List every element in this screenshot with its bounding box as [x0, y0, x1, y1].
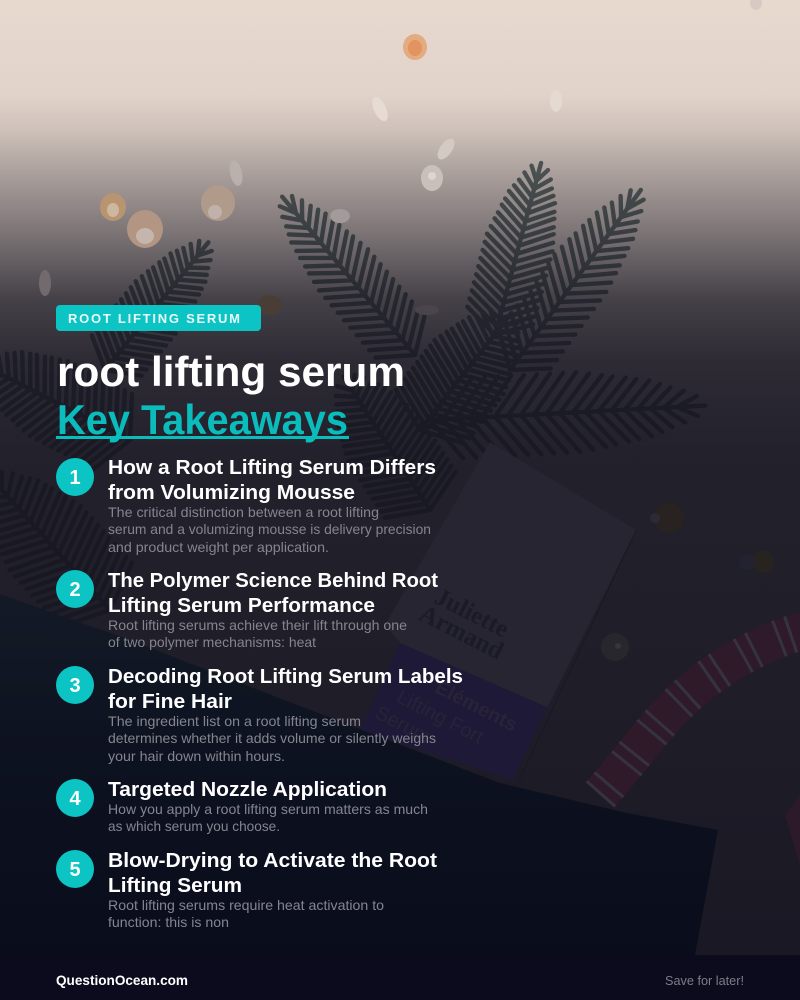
dim sequins on right [601, 503, 774, 661]
heading 4: Targeted Nozzle Application [108, 779, 387, 801]
description 2: of two polymer mechanisms: heat [108, 634, 316, 650]
paper edge [517, 530, 636, 785]
description 1: The critical distinction between a root lifting [108, 504, 379, 520]
product card [360, 442, 636, 781]
description 2: Root lifting serums achieve their lift through one [108, 617, 407, 633]
heading 2: Lifting Serum Performance [108, 595, 375, 617]
description 1 [108, 504, 431, 555]
description 4: as which serum you choose. [108, 818, 280, 834]
description 5: function: this is non [108, 914, 229, 930]
description 4: How you apply a root lifting serum matters as much [108, 801, 428, 817]
heading 3 [108, 666, 463, 713]
number badge 3 [56, 666, 94, 704]
takeaway 4 [56, 779, 428, 834]
heading 2 [108, 570, 438, 617]
description 3: determines whether it adds volume or silently weighs [108, 730, 436, 746]
heading 5 [108, 850, 437, 897]
footer bar [0, 955, 800, 1000]
heading 5: Blow-Drying to Activate the Root [108, 850, 437, 872]
product label text: Lifting Fort [393, 686, 487, 749]
heading 5: Lifting Serum [108, 875, 242, 897]
description 5 [108, 897, 384, 930]
heading 1 [108, 457, 436, 504]
number badge 1: 1 [69, 467, 81, 489]
number badge 5 [56, 850, 94, 888]
category tag [56, 305, 261, 331]
number badge 2 [56, 570, 94, 608]
product label text [371, 657, 521, 781]
title: root lifting serum [57, 348, 405, 395]
product label text: Serum [371, 702, 434, 748]
fir branches [0, 154, 707, 642]
takeaway 2 [56, 570, 438, 650]
number badge 5: 5 [69, 859, 81, 881]
footer save note: Save for later! [665, 973, 744, 988]
description 1: serum and a volumizing mousse is delivery precision [108, 521, 431, 537]
product label text: Éléments [431, 676, 521, 736]
product brand name [415, 581, 518, 665]
description 4 [108, 801, 428, 834]
number badge 4: 4 [69, 788, 81, 810]
number badge 1 [56, 458, 94, 496]
takeaway 1 [56, 457, 436, 555]
heading 1: How a Root Lifting Serum Differs [108, 457, 436, 479]
dark folded cloth [0, 594, 718, 955]
takeaway 5 [56, 850, 437, 930]
description 5: Root lifting serums require heat activation to [108, 897, 384, 913]
footer site name: QuestionOcean.com [56, 972, 188, 988]
product brand name: Juliette [430, 583, 513, 643]
description 1: and product weight per application. [108, 539, 329, 555]
category tag: ROOT LIFTING SERUM [68, 311, 240, 326]
heading 1: from Volumizing Mousse [108, 482, 355, 504]
heading 2: The Polymer Science Behind Root [108, 570, 438, 592]
heading 3: for Fine Hair [108, 691, 232, 713]
description 2 [108, 617, 407, 650]
number badge 4 [56, 779, 94, 817]
candy cane ribbon [600, 630, 800, 865]
scattered sequins and pearls [39, 0, 762, 315]
description 3: The ingredient list on a root lifting serum [108, 713, 361, 729]
heading 3: Decoding Root Lifting Serum Labels [108, 666, 463, 688]
product brand name: Armand [415, 600, 508, 665]
description 3 [108, 713, 436, 764]
number badge 3: 3 [69, 675, 81, 697]
subtitle: Key Takeaways [57, 396, 348, 443]
description 3: your hair down within hours. [108, 748, 285, 764]
takeaway 3 [56, 666, 463, 764]
number badge 2: 2 [69, 579, 81, 601]
